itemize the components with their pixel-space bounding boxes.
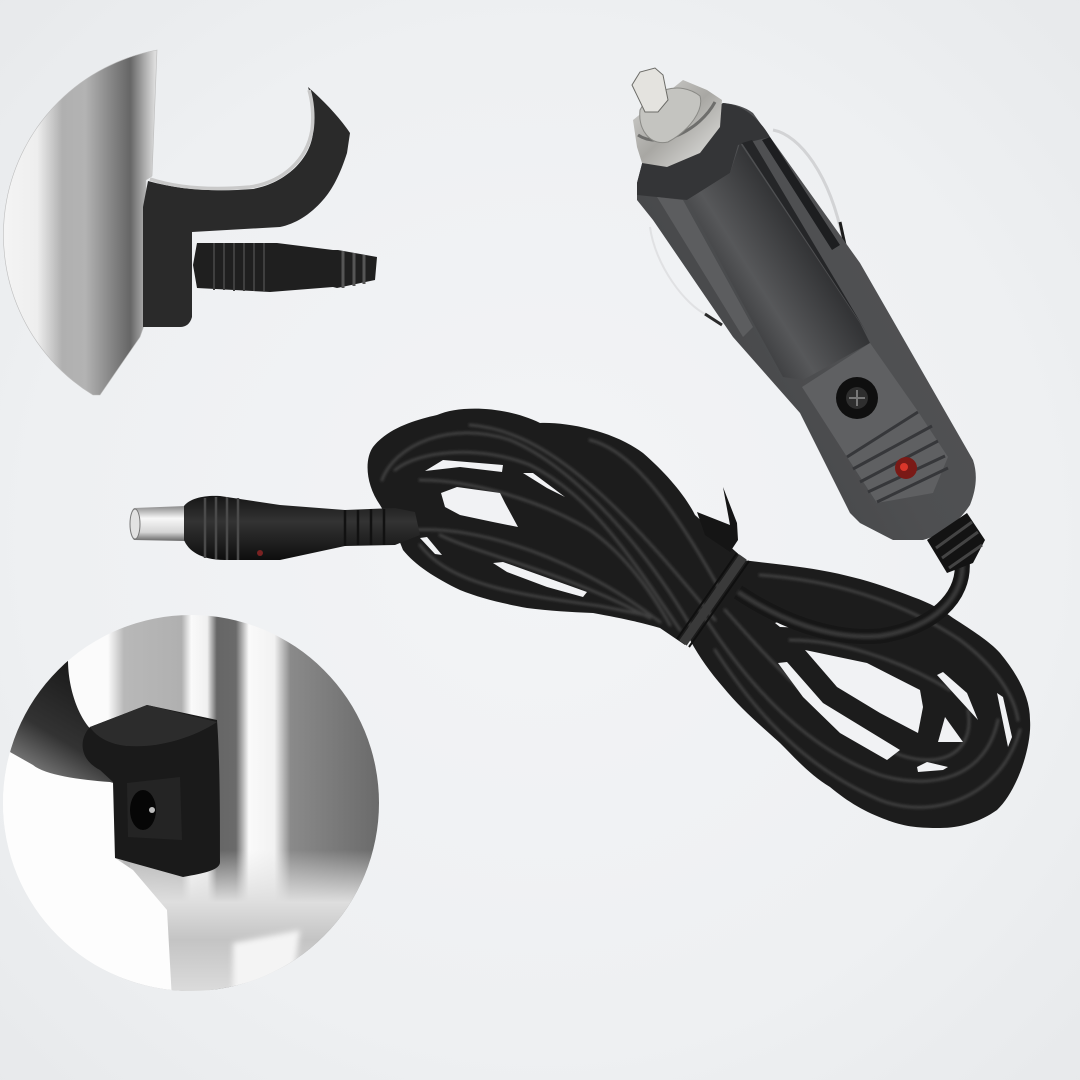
small plug (193, 243, 377, 292)
gaps in upper bundle (420, 460, 587, 597)
ridged LED strip (847, 412, 948, 502)
upper bundle (368, 409, 745, 645)
illustration: cigarette lighter plug (632, 68, 985, 573)
illustration: coiled black cable (368, 409, 1030, 828)
fuse cap (836, 377, 878, 419)
hook highlight (150, 90, 313, 188)
housing recess (687, 143, 870, 380)
nose flange (633, 80, 722, 167)
illustration: barrel DC plug (130, 496, 420, 560)
plug grip ridges (214, 243, 364, 291)
socket hole (130, 790, 156, 830)
lower base of stainless body (130, 854, 372, 991)
metal body (3, 50, 157, 395)
metal springs (773, 130, 843, 240)
lower loop (690, 560, 1030, 828)
black socket block (83, 705, 220, 877)
strain relief (927, 513, 985, 573)
plug body (184, 496, 420, 560)
cable highlights (382, 425, 1020, 807)
panel: top-left detail circle (3, 50, 377, 395)
plug main housing (637, 103, 976, 540)
metal tip (130, 506, 186, 541)
plug ridges (205, 497, 384, 560)
white left area (110, 782, 172, 990)
panel: bottom-left detail circle (0, 610, 385, 1000)
left rail (657, 197, 753, 337)
dark nose shoulder (637, 103, 770, 200)
contact tip (632, 68, 668, 112)
switch panel (802, 343, 948, 503)
black hook bracket (143, 87, 350, 327)
right rail (742, 140, 868, 335)
gaps in lower loop (775, 620, 1012, 772)
dark left handle (10, 660, 113, 783)
socket face (127, 777, 182, 840)
cable from lighter plug (738, 560, 962, 637)
illustration: cable tie (677, 487, 749, 647)
red LED (895, 457, 917, 479)
stem highlight (230, 928, 302, 986)
knurled nut (640, 88, 701, 143)
